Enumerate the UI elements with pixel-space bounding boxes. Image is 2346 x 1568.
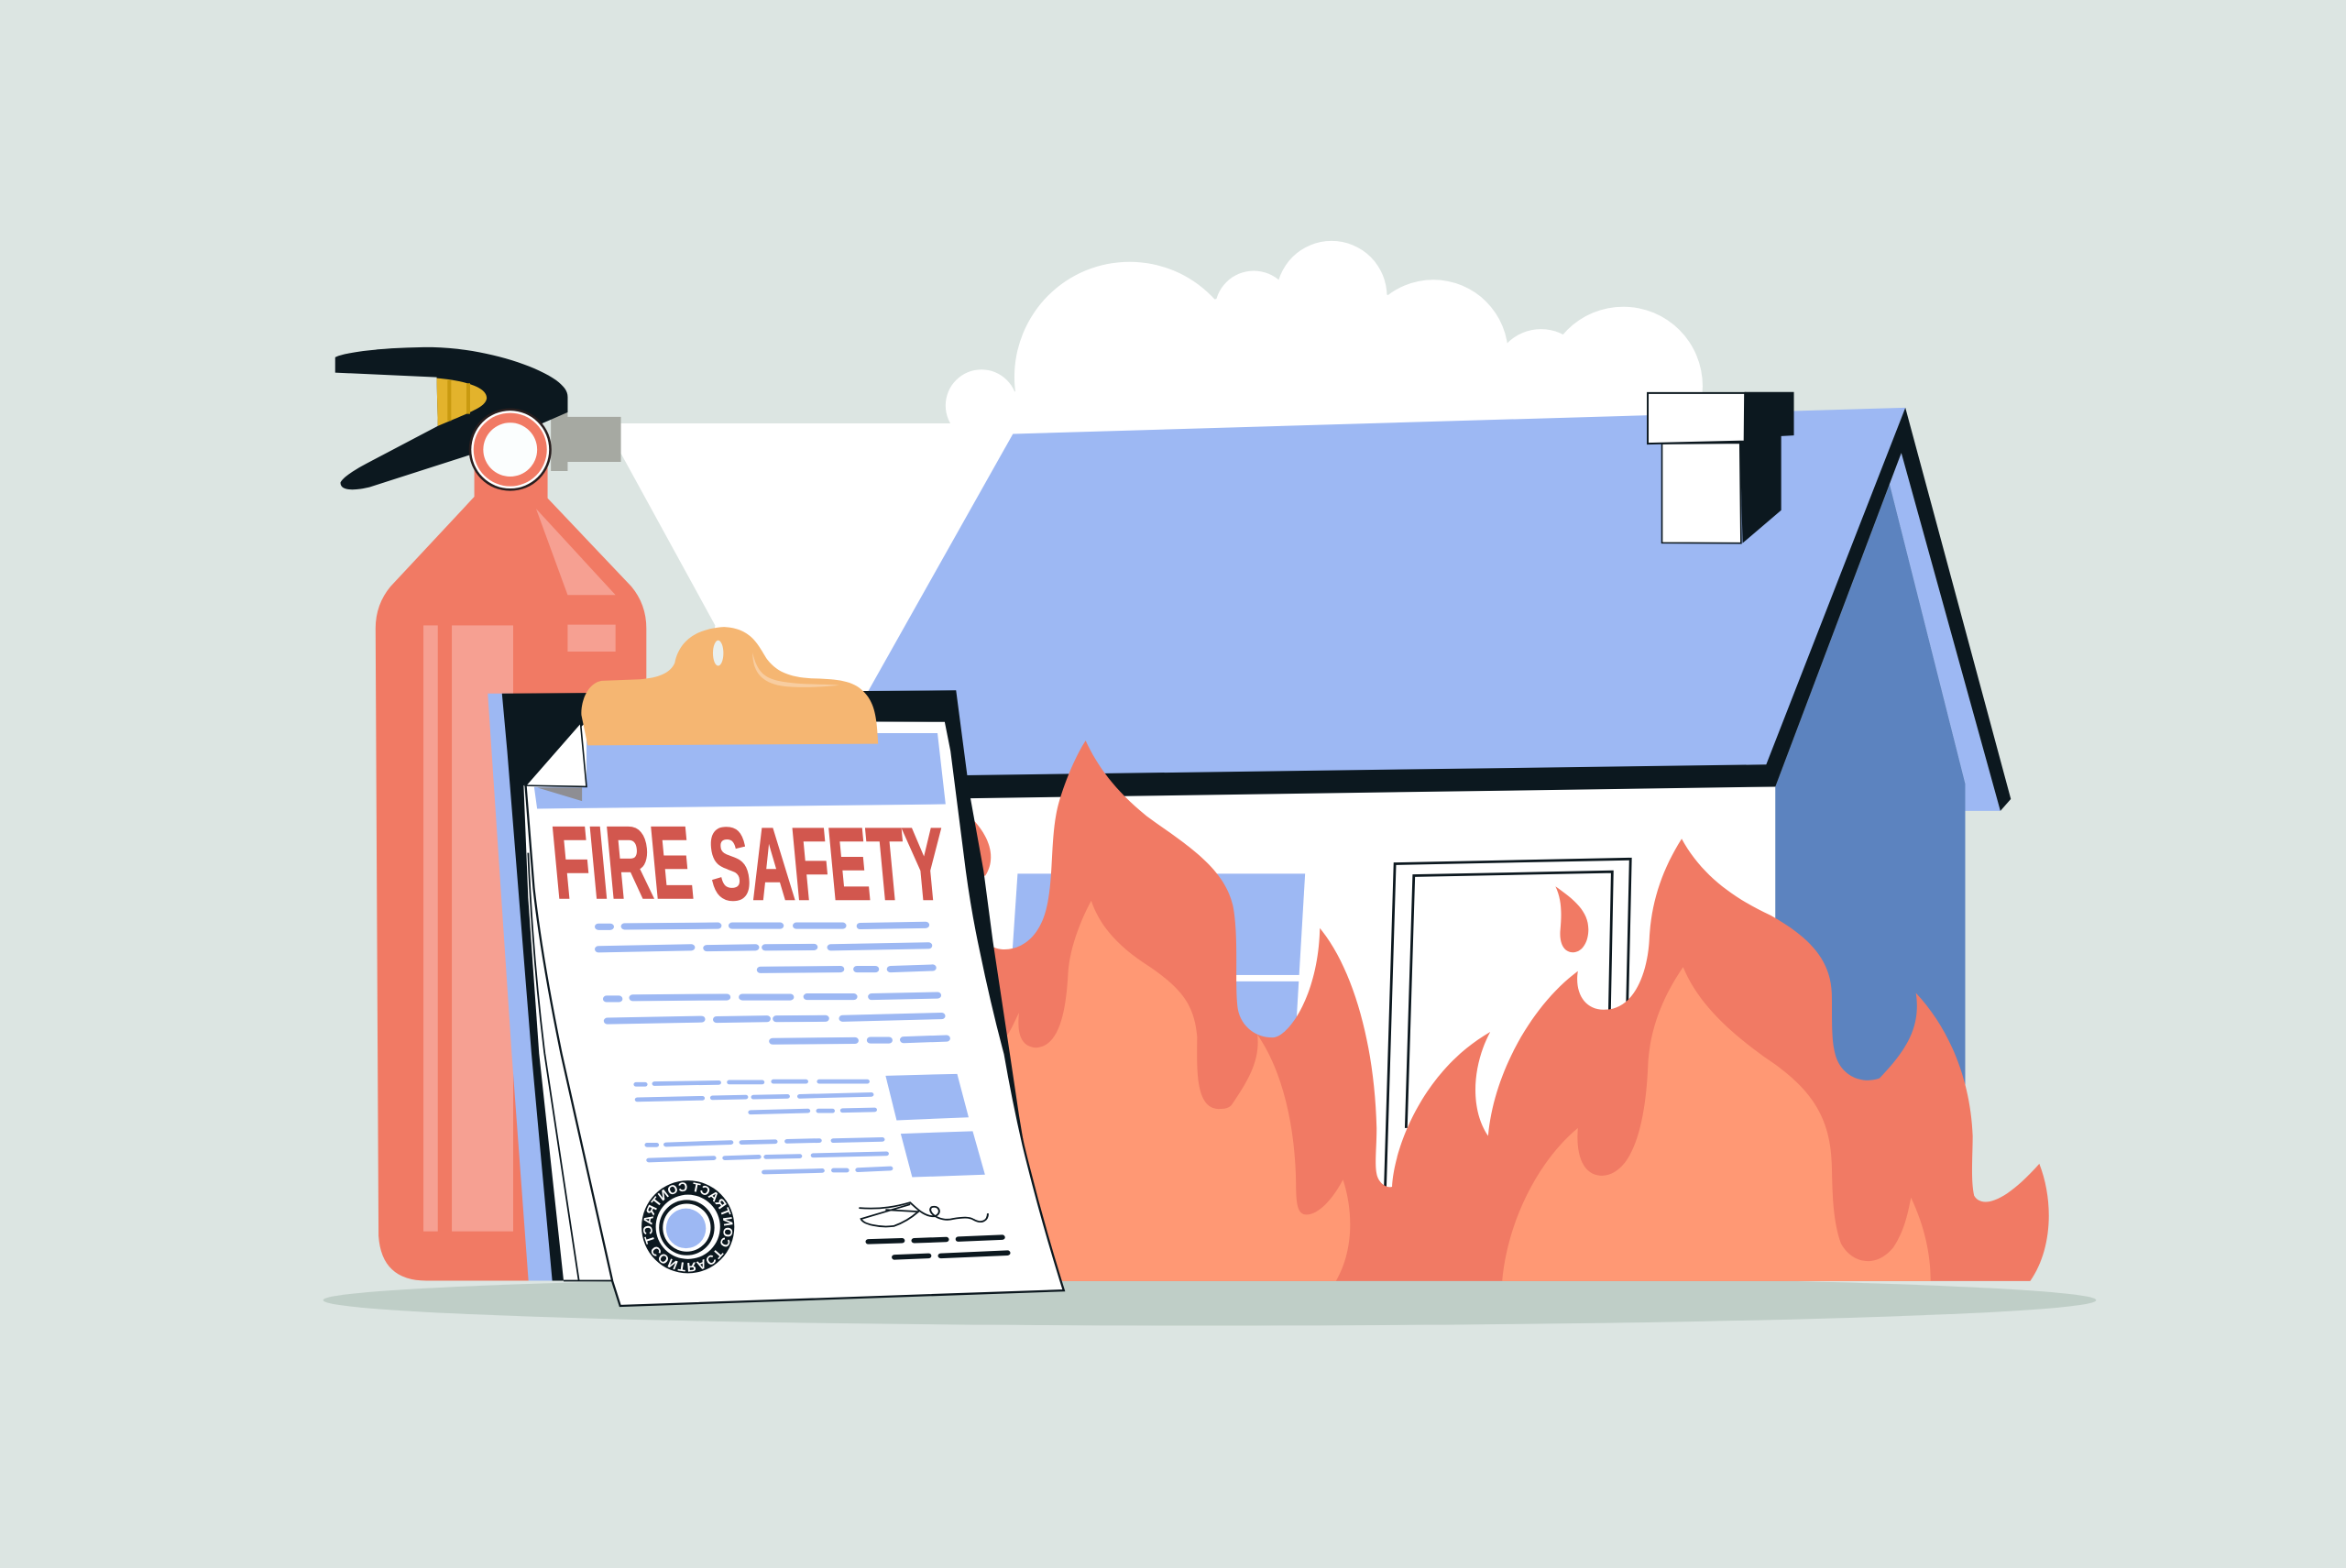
image placeholders <box>885 1074 969 1120</box>
smoke cloud <box>946 241 1703 492</box>
window <box>1006 873 1305 1040</box>
small text lines <box>636 1081 891 1172</box>
clip hole <box>713 641 723 666</box>
document title: SAFETY <box>704 806 950 921</box>
body text lines <box>598 925 947 1041</box>
house front wall <box>927 785 1775 1265</box>
small flame behind clipboard <box>958 806 991 882</box>
folded corner shadow <box>537 787 582 801</box>
body highlights <box>423 509 616 1232</box>
door <box>1385 859 1630 1191</box>
roof front <box>838 408 1905 778</box>
outer flame <box>901 740 2049 1281</box>
document title: FIRE <box>547 806 697 920</box>
paper header band <box>534 733 946 808</box>
chimney <box>1648 392 1794 543</box>
fire extinguisher <box>335 347 646 1281</box>
document contents <box>598 925 1007 1257</box>
ground shadow <box>323 1275 2096 1326</box>
window and door <box>1006 859 1630 1191</box>
inner flame left <box>901 901 1350 1281</box>
inner flame right <box>1502 967 1931 1281</box>
spray cone from nozzle <box>621 423 1047 696</box>
signature lines <box>869 1237 1007 1257</box>
document title <box>547 806 950 921</box>
handle <box>335 347 567 489</box>
flames <box>901 740 2049 1281</box>
clipboard board edge <box>488 694 561 1281</box>
clipboard with fire safety document <box>488 627 1065 1307</box>
house side wall <box>1775 484 1965 1265</box>
roof side strip <box>1890 453 2001 811</box>
clipboard board <box>502 690 1026 1281</box>
folded corner <box>526 723 586 786</box>
roof eave and rake <box>927 408 2011 811</box>
trigger gold <box>437 378 487 426</box>
under sheets <box>523 748 629 1281</box>
clip highlight <box>752 652 839 687</box>
signature <box>859 1202 988 1226</box>
contract stamp: CONTRACT CONTRACT CONTRACT <box>643 1182 733 1272</box>
extinguisher body <box>376 449 646 1281</box>
nozzle <box>551 409 621 471</box>
clip <box>581 627 878 745</box>
front paper <box>526 719 1064 1306</box>
flame drop on door <box>1555 886 1588 952</box>
gauge <box>469 409 552 491</box>
house <box>838 392 2011 1265</box>
